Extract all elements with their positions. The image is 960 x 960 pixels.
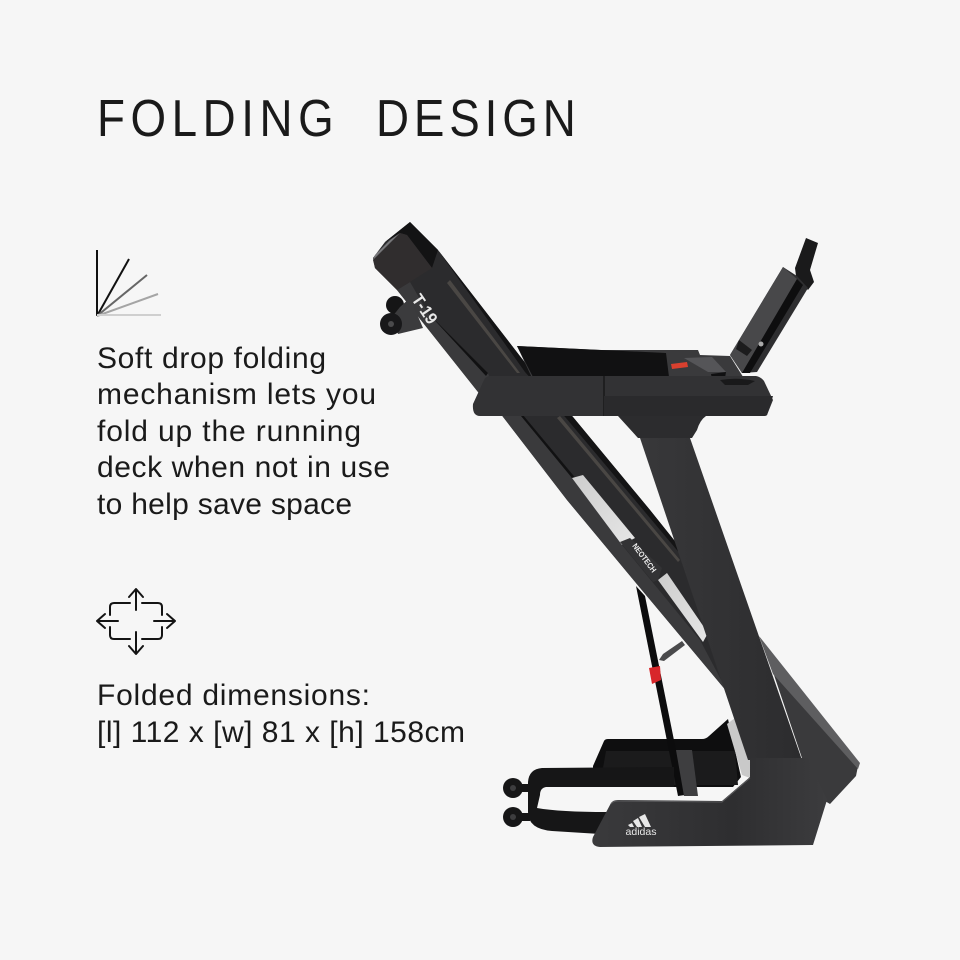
text block: folding mechanism description: to help save space — [97, 488, 352, 521]
deck end cap — [385, 222, 438, 268]
handlebar console — [473, 376, 773, 438]
text block: folded dimensions: [l] 112 x [w] 81 x [h] 158cm — [97, 716, 465, 749]
adidas logo — [626, 814, 656, 838]
console tray — [517, 346, 745, 380]
upright column — [640, 438, 802, 760]
text block: folding mechanism description: fold up the running — [97, 415, 361, 448]
icon: folding angle lines — [97, 250, 161, 316]
console neck — [618, 416, 706, 438]
title: FOLDING — [97, 90, 334, 148]
deck model label: T-19 — [408, 291, 441, 328]
console tablet and handle — [730, 238, 818, 373]
metal bracket — [659, 641, 685, 661]
frame wheels — [503, 778, 530, 827]
text block: folded dimensions — [97, 679, 465, 749]
text block: folding mechanism description: deck when not in use — [97, 451, 390, 484]
strut base bracket — [676, 750, 698, 796]
title: DESIGN — [376, 90, 576, 148]
deck side rail — [397, 282, 728, 693]
black rear tray under deck — [593, 719, 741, 787]
folded running deck — [373, 222, 728, 693]
gas strut — [636, 586, 685, 796]
NEO TECH badge: NEOTECH — [630, 542, 658, 575]
text block: folding mechanism description — [97, 342, 390, 521]
U-shaped front frame — [503, 767, 674, 834]
base housing — [592, 758, 827, 847]
deck inner band — [447, 280, 680, 562]
rear hood — [759, 636, 860, 804]
text block: folding mechanism description: mechanism lets you — [97, 378, 376, 411]
text block: folding mechanism description: Soft drop folding — [97, 342, 326, 375]
treadmill illustration — [373, 222, 860, 847]
adidas logo: adidas — [626, 826, 656, 838]
silver side rails — [572, 475, 635, 545]
deck outer black edge — [438, 250, 692, 568]
lift mechanism light panel — [727, 718, 752, 778]
NEO TECH badge — [620, 538, 662, 582]
title — [97, 90, 576, 148]
icon: expanding dimensions arrows — [97, 589, 175, 654]
text block: folded dimensions: Folded dimensions: — [97, 679, 370, 712]
rear wheels at top of deck — [380, 296, 423, 335]
